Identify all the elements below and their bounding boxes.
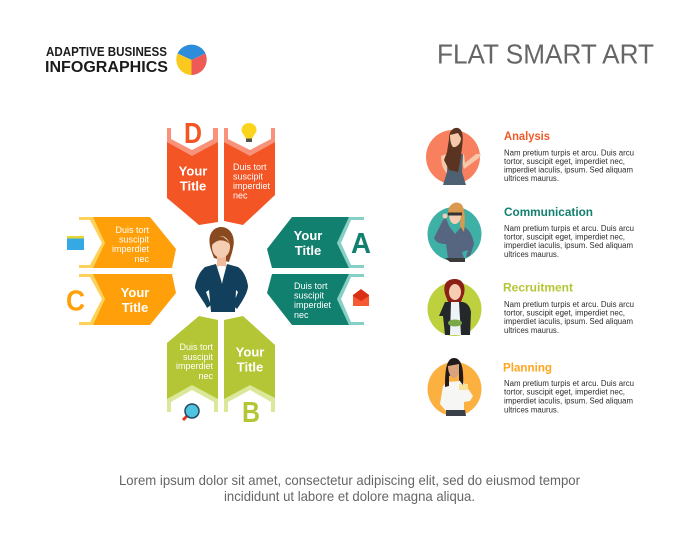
segment C title: Your	[121, 285, 149, 300]
segment D title: Your	[179, 164, 207, 178]
item: Analysis	[426, 128, 634, 185]
segment A title: Your	[294, 228, 322, 243]
item: Planning: ultrices maurus.	[504, 406, 559, 414]
item: Recruitment	[428, 279, 634, 336]
segment A text: Duis tort	[294, 281, 328, 291]
item: Analysis: Nam pretium turpis et arcu. Duis arcu	[504, 148, 634, 158]
logo pie icon	[176, 45, 207, 75]
portrait: Communication	[428, 202, 482, 262]
item: Analysis: Analysis	[504, 131, 550, 143]
segment A title	[267, 217, 371, 268]
segment B text	[167, 316, 218, 420]
footer text: incididunt ut labore et dolore magna aliqua.	[224, 488, 475, 504]
segment B title: Title	[237, 360, 263, 374]
item: Planning: Planning	[503, 362, 552, 374]
segment B title: Your	[236, 344, 264, 360]
item: Recruitment: Recruitment	[503, 282, 573, 294]
segment C text: suscipit	[119, 234, 149, 244]
segment A title: Title	[295, 243, 321, 258]
icon: light bulb	[242, 123, 256, 142]
item: Recruitment: tortor, suscipit eget, imperdiet nec,	[504, 308, 625, 318]
item: Analysis: imperdiet iaculis, ipsum. Sed aliquam	[504, 166, 633, 174]
segment B text: suscipit	[183, 352, 213, 362]
item: Recruitment: ultrices maurus.	[504, 326, 559, 335]
item: Communication: Nam pretium turpis et arcu. Duis arcu	[504, 224, 634, 233]
item: Communication	[428, 202, 634, 262]
icon: envelope	[353, 289, 369, 306]
segment C text: Duis tort	[115, 225, 149, 235]
segment A text: nec	[294, 310, 309, 320]
segment B text: imperdiet	[176, 361, 213, 371]
logo text: ADAPTIVE BUSINESS	[46, 45, 167, 59]
item: Recruitment: imperdiet iaculis, ipsum. Sed aliquam	[504, 317, 633, 326]
item: Analysis: tortor, suscipit eget, imperdiet nec,	[504, 157, 625, 166]
logo	[45, 45, 207, 76]
item: Communication: Communication	[504, 207, 593, 219]
segment D title	[167, 118, 218, 225]
segment B text: Duis tort	[179, 342, 213, 352]
item: Communication: ultrices maurus.	[504, 250, 559, 259]
logo text	[45, 45, 168, 76]
segment D text: suscipit	[233, 172, 264, 182]
footer text: Lorem ipsum dolor sit amet, consectetur adipiscing elit, sed do eiusmod tempor	[119, 472, 580, 488]
segment D text: imperdiet	[233, 181, 271, 191]
item: Recruitment: Nam pretium turpis et arcu. Duis arcu	[504, 300, 634, 309]
item: Communication: tortor, suscipit eget, imperdiet nec,	[504, 232, 625, 242]
segment D text: nec	[233, 190, 248, 200]
footer text	[119, 472, 580, 504]
segment A text: imperdiet	[294, 300, 332, 310]
logo text: INFOGRAPHICS	[45, 59, 168, 76]
segment C title: C	[66, 286, 85, 318]
segment D text	[224, 123, 275, 225]
segment C text	[67, 217, 176, 268]
segment C text: nec	[134, 254, 149, 264]
portrait: Analysis	[426, 128, 481, 185]
portrait: Recruitment	[428, 279, 482, 336]
segment D title: D	[184, 118, 202, 150]
item: Analysis: ultrices maurus.	[504, 174, 559, 183]
central businesswoman	[195, 227, 248, 312]
people list	[426, 128, 634, 416]
main title: FLAT SMART ART	[437, 38, 654, 70]
segment C title	[66, 274, 176, 325]
icon: calendar	[67, 236, 84, 250]
segment C title: Title	[122, 300, 148, 315]
segment A text: suscipit	[294, 290, 325, 300]
icon: magnifier	[183, 404, 199, 420]
item: Planning: imperdiet iaculis, ipsum. Sed aliquam	[504, 396, 633, 406]
segment B title: B	[242, 397, 260, 429]
diagram: six-way arrows	[66, 118, 371, 429]
portrait: Planning	[428, 358, 482, 416]
item: Planning: Nam pretium turpis et arcu. Duis arcu	[504, 379, 634, 388]
segment D text: Duis tort	[233, 162, 267, 172]
segment B title	[224, 316, 275, 429]
segment B text: nec	[198, 371, 213, 381]
segment C text: imperdiet	[112, 244, 149, 254]
item: Planning: tortor, suscipit eget, imperdiet nec,	[504, 388, 625, 396]
segment D title: Title	[180, 178, 206, 194]
segment A text	[267, 274, 369, 325]
item: Planning	[428, 358, 634, 416]
item: Communication: imperdiet iaculis, ipsum. Sed aliquam	[504, 241, 633, 250]
segment A title: A	[351, 228, 371, 260]
